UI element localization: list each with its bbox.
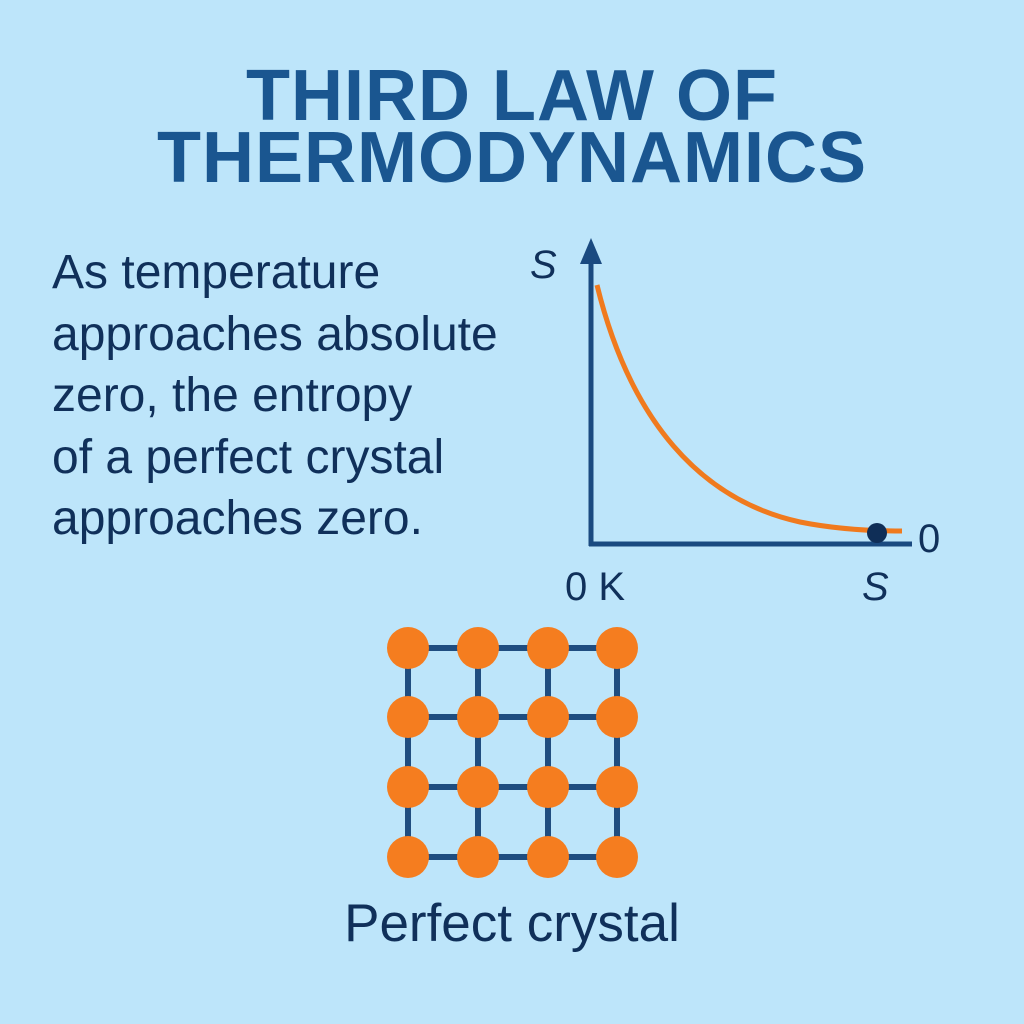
- text block: statement: zero, the entropy: [52, 369, 412, 422]
- curve: [597, 285, 902, 531]
- text block: statement: approaches absolute: [52, 308, 498, 360]
- title: THERMODYNAMICS: [157, 118, 867, 198]
- labels: S: [530, 243, 557, 287]
- labels: S: [862, 565, 889, 609]
- text block: statement: As temperature: [52, 246, 380, 299]
- title: [157, 56, 867, 198]
- caption: Perfect crystal: [344, 894, 680, 953]
- icon: perfect crystal lattice: [387, 627, 638, 878]
- text block: statement: [52, 246, 498, 545]
- labels: 0 K: [565, 565, 625, 609]
- text block: statement: approaches zero.: [52, 492, 423, 545]
- labels: [530, 243, 940, 609]
- labels: 0: [918, 517, 940, 561]
- text block: statement: of a perfect crystal: [52, 430, 444, 484]
- title: THIRD LAW OF: [246, 56, 778, 136]
- axes: [589, 250, 912, 546]
- dot: [867, 523, 887, 543]
